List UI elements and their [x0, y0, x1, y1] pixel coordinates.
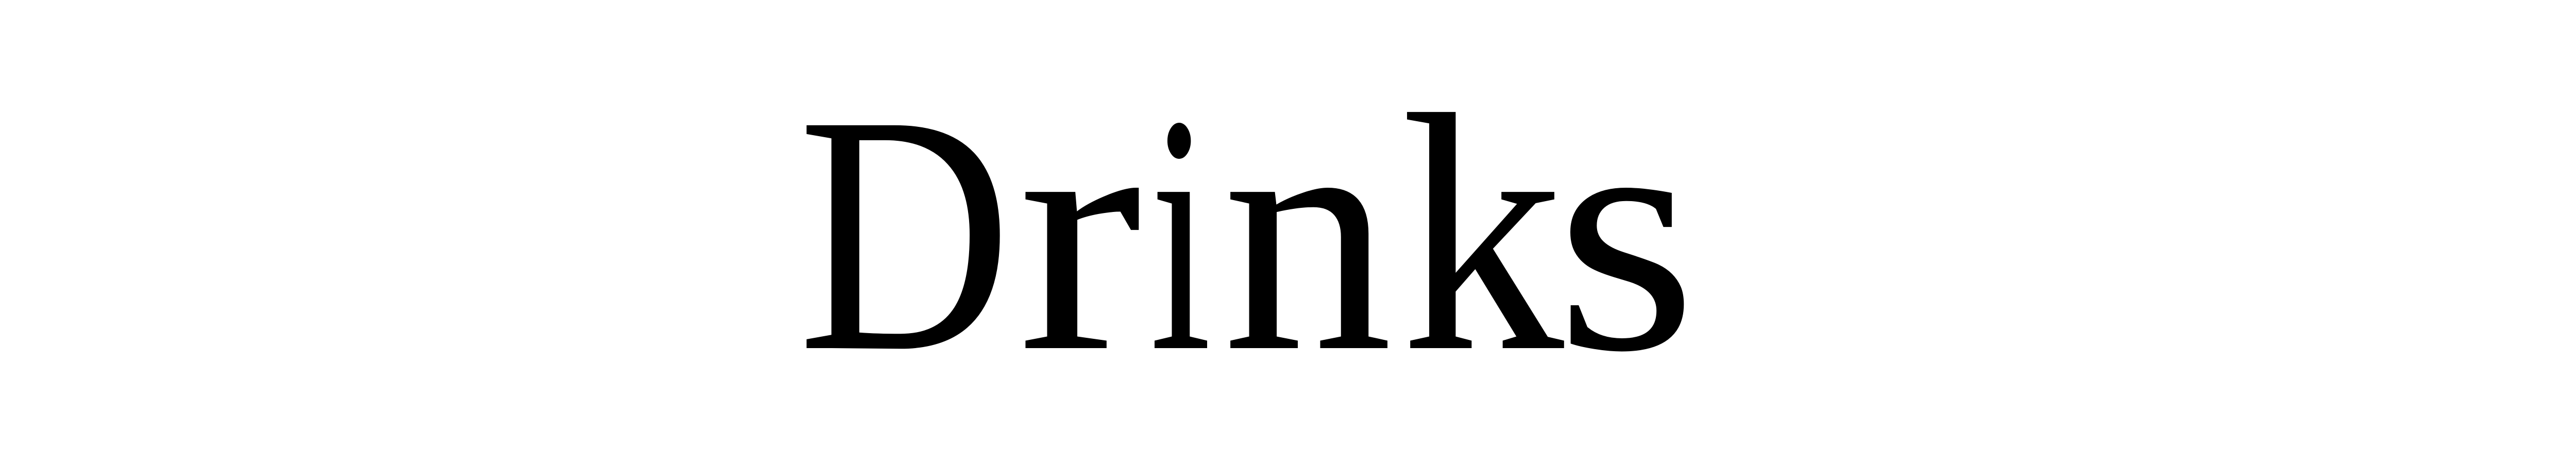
title: Drinks: n	[1223, 45, 1393, 422]
title: Drinks: r	[1018, 45, 1142, 422]
title: Drinks: s	[1555, 45, 1697, 422]
title: Drinks: D	[798, 45, 1012, 422]
title: Drinks: i	[1150, 45, 1211, 422]
title: Drinks	[798, 45, 1697, 422]
title: Drinks: k	[1401, 45, 1564, 422]
